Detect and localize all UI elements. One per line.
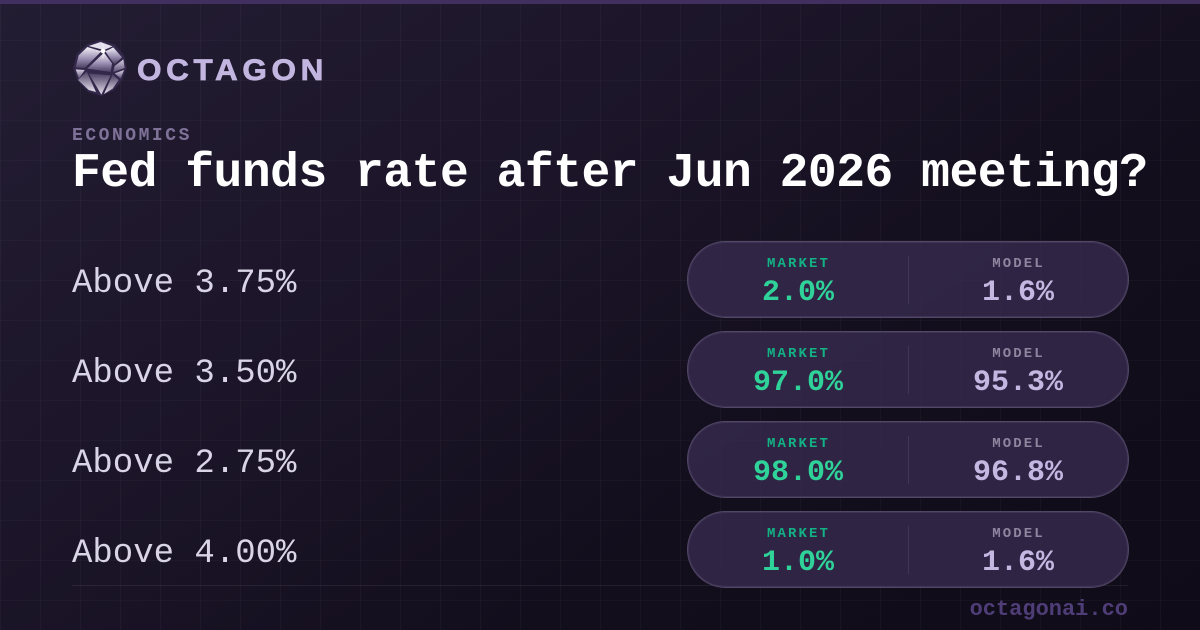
logo [73, 40, 328, 96]
pill: Above 2.75%: 98.0% [753, 456, 843, 490]
pill: Above 3.75% [687, 241, 1129, 318]
pill: Above 4.00%: 1.0% [762, 546, 834, 580]
pill: Above 3.75%: MODEL [992, 256, 1045, 272]
pill: Above 3.75%: MARKET [767, 256, 830, 272]
market value [753, 346, 843, 400]
pill: Above 4.00%: MARKET [767, 526, 830, 542]
market value [762, 256, 834, 310]
pill: Above 2.75% [687, 421, 1129, 498]
row label: Above 4.00%: Above 4.00% [72, 535, 296, 573]
icon: faceted octagon gem [73, 40, 126, 96]
pill: Above 3.50% [687, 331, 1129, 408]
footer url: octagonai.co [970, 597, 1128, 622]
pill: Above 2.75%: MODEL [992, 436, 1045, 452]
pill: Above 4.00%: MODEL [992, 526, 1045, 542]
pill: Above 4.00% [687, 511, 1129, 588]
pill: Above 3.75%: 2.0% [762, 276, 834, 310]
row label: Above 3.50%: Above 3.50% [72, 355, 296, 393]
row label: Above 3.75%: Above 3.75% [72, 265, 296, 303]
pill: Above 3.50%: MARKET [767, 346, 830, 362]
category label: ECONOMICS [72, 126, 192, 146]
pill: Above 3.50%: 95.3% [973, 366, 1063, 400]
market value [753, 436, 843, 490]
model value [982, 256, 1054, 310]
pill: Above 2.75%: MARKET [767, 436, 830, 452]
model value [982, 526, 1054, 580]
wordmark: OCTAGON [137, 54, 328, 87]
model value [973, 346, 1063, 400]
pill: Above 4.00%: 1.6% [982, 546, 1054, 580]
pill: Above 3.50%: 97.0% [753, 366, 843, 400]
title: Fed funds rate after Jun 2026 meeting? [72, 147, 1148, 201]
row label: Above 2.75%: Above 2.75% [72, 445, 296, 483]
market value [762, 526, 834, 580]
model value [973, 436, 1063, 490]
pill: Above 3.50%: MODEL [992, 346, 1045, 362]
top accent bar [0, 0, 1200, 4]
pill: Above 3.75%: 1.6% [982, 276, 1054, 310]
pill: Above 2.75%: 96.8% [973, 456, 1063, 490]
